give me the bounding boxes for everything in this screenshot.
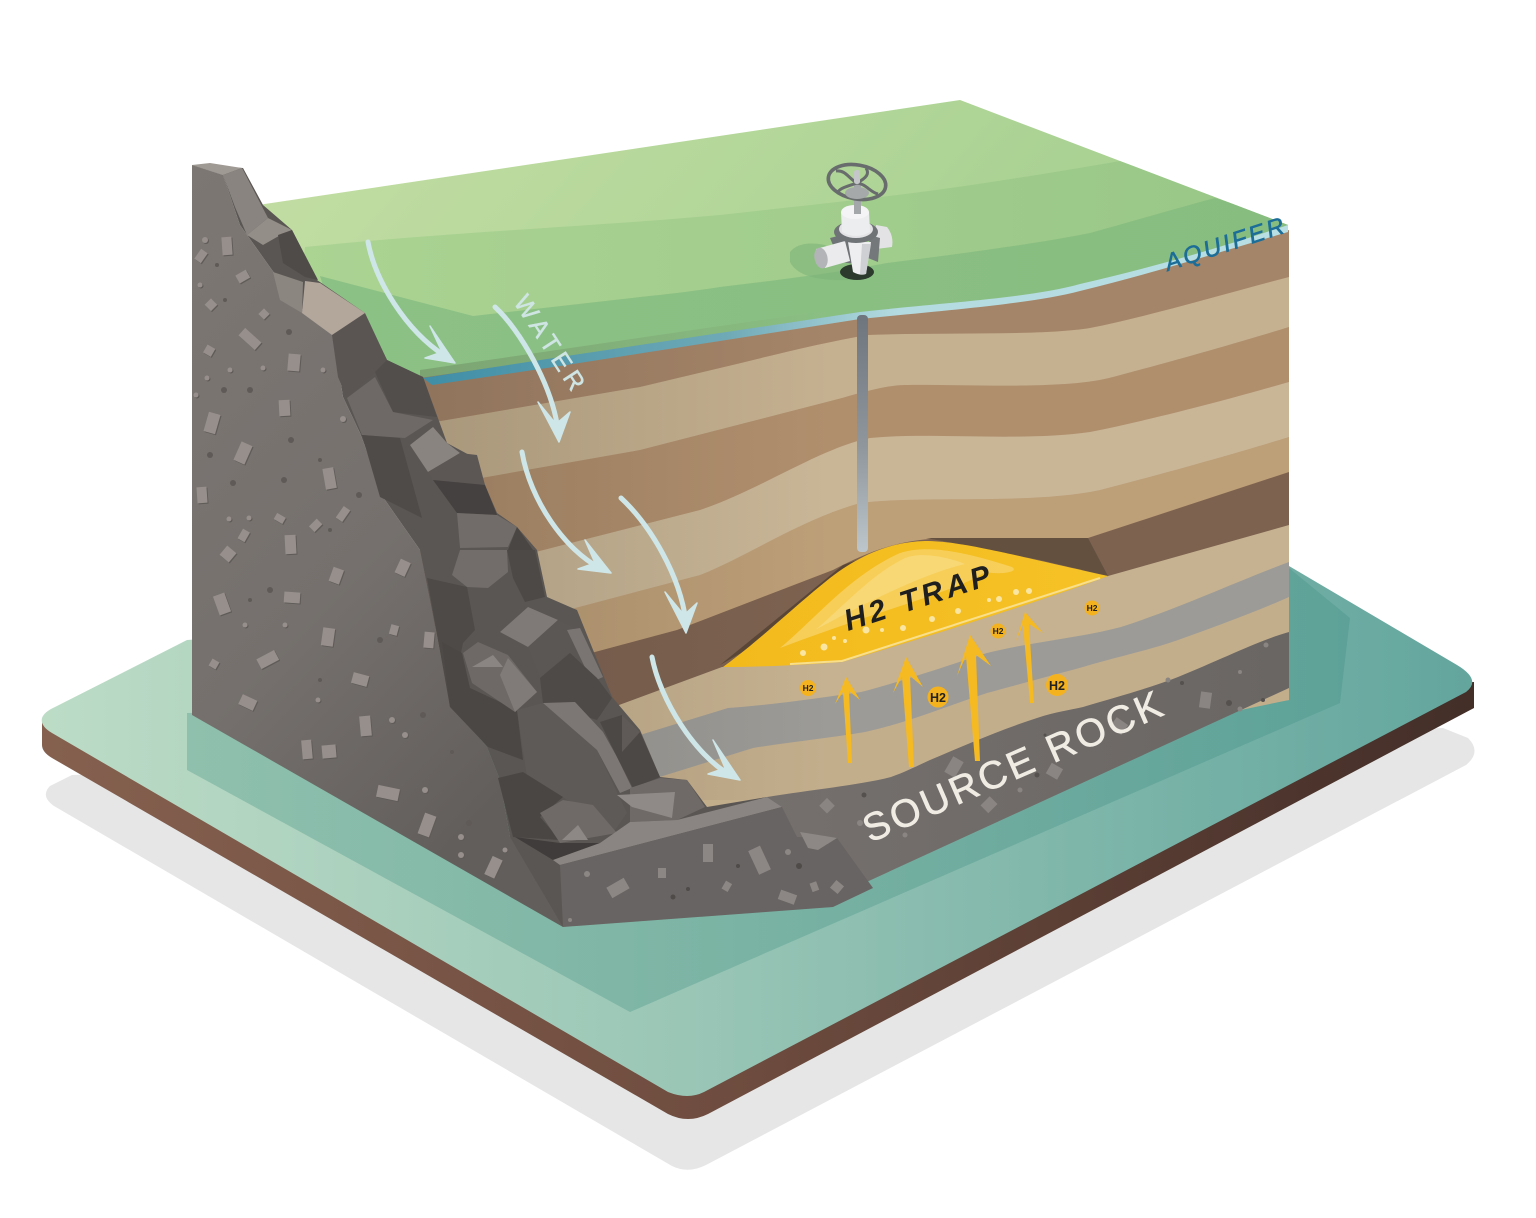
dome inner highlight — [815, 555, 965, 630]
badge: H2 small right: H2 — [1087, 603, 1098, 613]
water flow arrows — [368, 242, 740, 780]
arrow: hydrogen 2 — [893, 657, 923, 767]
label: H2 TRAP: H2 TRAP — [840, 559, 996, 638]
stem — [854, 182, 861, 214]
grass bands — [304, 161, 1288, 378]
left side shading — [420, 310, 830, 800]
H2 trap dome — [720, 541, 1108, 667]
icon: wellhead valve — [790, 160, 892, 280]
layer: upper brown — [420, 230, 1289, 700]
badge: H2 small middle — [990, 624, 1006, 638]
body — [848, 242, 871, 275]
layer: dark cap above trap — [926, 538, 1108, 576]
cliff: left rock face — [192, 165, 563, 927]
arrow: water 5 — [652, 657, 740, 780]
grass band front — [320, 198, 1288, 378]
badge: H2 right — [1046, 674, 1068, 696]
arrow: hydrogen 3 — [957, 635, 991, 761]
label: SOURCE ROCK: SOURCE ROCK — [856, 683, 1169, 851]
arrow: water 3 — [522, 452, 611, 573]
cliff dark specks — [207, 263, 542, 868]
strata: rock layers — [420, 230, 1289, 900]
layer: lower tan — [650, 597, 1289, 830]
cliff: fractured rock front — [192, 163, 782, 927]
cliff stones — [194, 237, 508, 879]
ground shadow — [46, 728, 1475, 1170]
slab dark specks — [670, 863, 802, 900]
collar — [834, 221, 878, 243]
grass band middle — [304, 161, 1288, 316]
dome highlight — [780, 549, 1014, 648]
layer: tan reservoir — [600, 525, 1289, 800]
block shadow on plate — [187, 568, 1350, 1012]
slab stones — [568, 844, 844, 922]
side flanges — [830, 234, 856, 264]
layer: middle tan — [520, 382, 1289, 700]
right pipe — [876, 225, 892, 249]
well pipe — [857, 315, 868, 552]
base plate — [42, 566, 1474, 1119]
dome base line — [790, 578, 1100, 664]
layer: upper tan — [435, 277, 1289, 700]
H2 molecule badges — [800, 600, 1100, 708]
badge: H2 centre — [928, 686, 948, 708]
surface: grass — [258, 100, 1300, 400]
gas bubbles — [800, 588, 1032, 656]
left pipe — [816, 241, 850, 268]
badge: H2 small middle: H2 — [993, 626, 1004, 636]
layer: middle brown — [470, 327, 1289, 700]
badge: H2 right: H2 — [1049, 679, 1065, 693]
aquifer strip — [423, 225, 1288, 385]
arrow: water 1 — [368, 242, 455, 363]
badge: H2 small left: H2 — [803, 683, 814, 693]
layer: source rock — [700, 632, 1289, 900]
label: WATER: WATER — [508, 290, 590, 396]
source rock dark specks — [862, 681, 1265, 798]
layer: dark brown — [580, 472, 1289, 720]
arrow: water 4 — [621, 498, 697, 633]
handwheel — [825, 160, 889, 204]
arrow: water 2 — [495, 307, 570, 442]
rock slab — [553, 797, 873, 927]
arrow: hydrogen 4 — [1016, 612, 1043, 703]
layer: gray — [630, 562, 1289, 800]
badge: H2 centre: H2 — [930, 691, 946, 705]
label: AQUIFER: AQUIFER — [1160, 213, 1288, 277]
source rock stones — [819, 642, 1268, 838]
layer: lower tan brown — [560, 437, 1289, 700]
badge: H2 small left — [800, 680, 816, 696]
bonnet — [841, 212, 870, 236]
badge: H2 small right — [1084, 600, 1100, 616]
arrow: hydrogen 1 — [835, 677, 860, 763]
hydrogen rising arrows — [835, 612, 1043, 767]
